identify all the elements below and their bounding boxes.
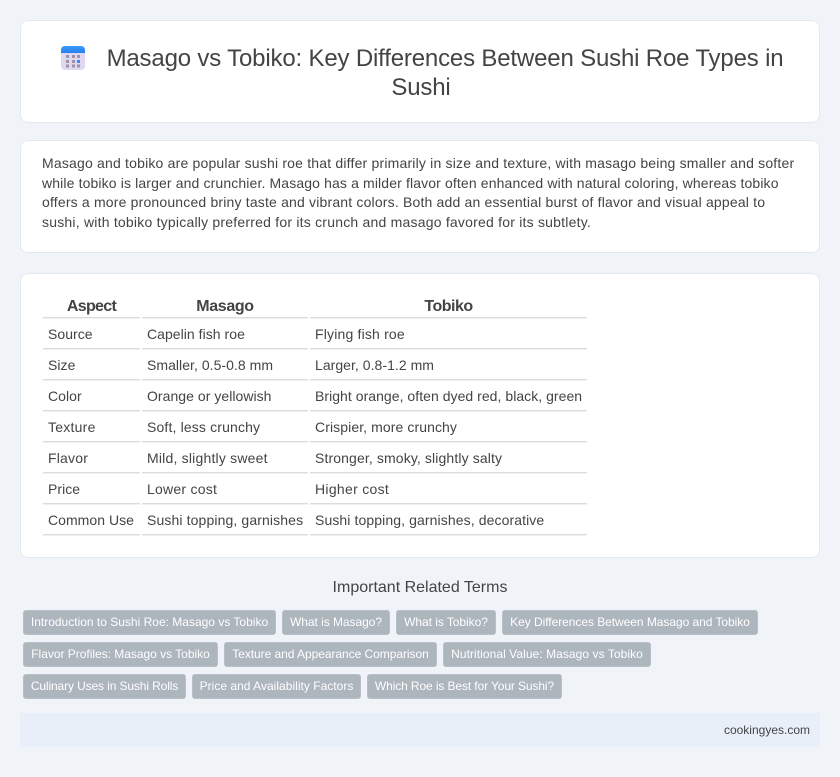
tag: price — [192, 674, 361, 699]
tag: price: Price and Availability Factors — [200, 679, 353, 693]
tag: what is masago — [282, 610, 390, 635]
text: Soft, less crunchy — [147, 419, 260, 435]
text: Flavor — [48, 450, 88, 466]
footer bar — [20, 713, 820, 747]
text: Higher cost — [315, 481, 389, 497]
tag: which roe — [367, 674, 562, 699]
text: Color — [48, 388, 82, 404]
panel: comparison table — [20, 273, 820, 558]
tag: which roe: Which Roe is Best for Your Sushi? — [375, 679, 554, 693]
panel: header — [20, 20, 820, 123]
text: Crispier, more crunchy — [315, 419, 457, 435]
tag: key differences — [502, 610, 758, 635]
text: Source — [48, 326, 93, 342]
title: Masago vs Tobiko: Key Differences Between Sushi Roe Types in — [107, 45, 783, 72]
intro paragraph: sushi, with tobiko typically preferred for its crunch and masago favored for its subtlety. — [42, 214, 591, 230]
icon: calendar — [61, 46, 85, 70]
tag: flavor profiles: Flavor Profiles: Masago vs Tobiko — [31, 647, 210, 661]
tag: texture — [224, 642, 437, 667]
text: Smaller, 0.5-0.8 mm — [147, 357, 273, 373]
footer source: cookingyes.com — [724, 723, 810, 737]
tag: nutritional value — [443, 642, 651, 667]
text: Common Use — [48, 512, 134, 528]
text: Price — [48, 481, 80, 497]
text: Flying fish roe — [315, 326, 405, 342]
intro paragraph: offers a more pronounced briny taste and vibrant colors. Both add an essential burst of flavor and visual appeal to — [42, 194, 765, 210]
table header: tobiko: Tobiko — [424, 298, 473, 315]
text: Bright orange, often dyed red, black, green — [315, 388, 582, 404]
tag: nutritional value: Nutritional Value: Masago vs Tobiko — [451, 647, 643, 661]
intro paragraph: while tobiko is larger and crunchier. Masago has a milder flavor often enhanced with natural coloring, whereas tobiko — [42, 175, 779, 191]
text: Stronger, smoky, slightly salty — [315, 450, 502, 466]
text: Texture — [48, 419, 96, 435]
tag: introduction — [23, 610, 276, 635]
intro paragraph — [42, 155, 794, 230]
panel: introduction text — [20, 140, 820, 253]
text: Sushi topping, garnishes — [147, 512, 303, 528]
tag: texture: Texture and Appearance Comparison — [232, 647, 429, 661]
text: Lower cost — [147, 481, 217, 497]
title — [107, 45, 783, 101]
text: Size — [48, 357, 75, 373]
text: Orange or yellowish — [147, 388, 271, 404]
table header: aspect: Aspect — [67, 298, 116, 315]
text: Larger, 0.8-1.2 mm — [315, 357, 434, 373]
tag: what is tobiko — [396, 610, 496, 635]
text: Capelin fish roe — [147, 326, 245, 342]
tag: culinary uses: Culinary Uses in Sushi Rolls — [31, 679, 178, 693]
title: Sushi — [391, 74, 451, 101]
text: Mild, slightly sweet — [147, 450, 268, 466]
tag: flavor profiles — [23, 642, 218, 667]
table header: masago: Masago — [196, 298, 254, 315]
text: Sushi topping, garnishes, decorative — [315, 512, 544, 528]
tag: what is tobiko: What is Tobiko? — [404, 615, 488, 629]
tag: what is masago: What is Masago? — [290, 615, 382, 629]
intro paragraph: Masago and tobiko are popular sushi roe that differ primarily in size and texture, with masago being smaller and softer — [42, 155, 794, 171]
tag: key differences: Key Differences Between Masago and Tobiko — [510, 615, 750, 629]
tag: culinary uses — [23, 674, 186, 699]
heading: related terms: Important Related Terms — [333, 579, 507, 596]
tag: introduction: Introduction to Sushi Roe: Masago vs Tobiko — [31, 615, 268, 629]
